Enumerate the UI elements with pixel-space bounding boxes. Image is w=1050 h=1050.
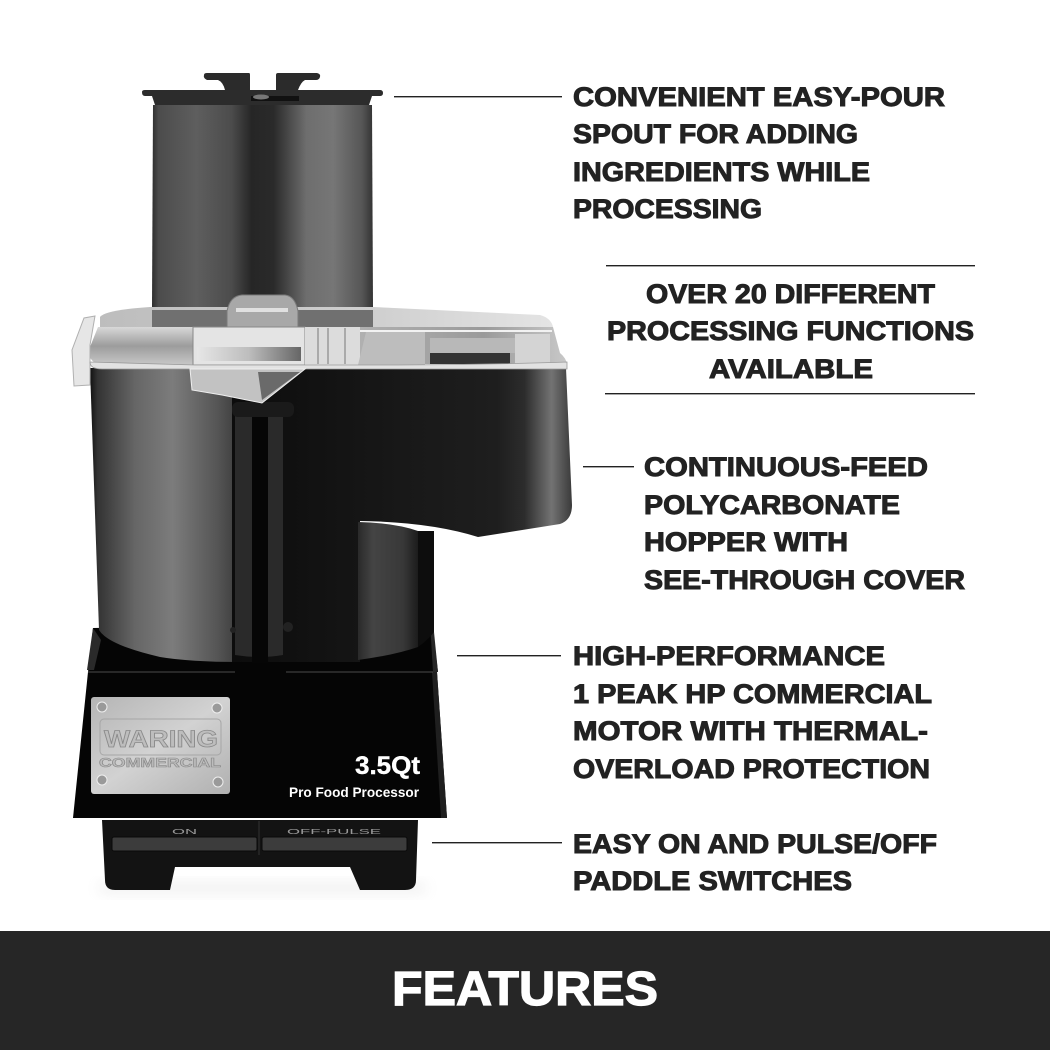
callout: commercial motor: MOTOR WITH THERMAL- <box>573 716 928 746</box>
callout: continuous-feed hopper: CONTINUOUS-FEED <box>644 452 928 482</box>
feed chute <box>230 402 294 663</box>
model label: Pro Food Processor <box>289 784 420 800</box>
on paddle switch <box>112 829 257 851</box>
callout: commercial motor: HIGH-PERFORMANCE <box>573 641 885 671</box>
callout: continuous-feed hopper <box>583 452 965 595</box>
callout: paddle switches <box>432 829 937 896</box>
switch housing and feet <box>102 820 418 890</box>
bowl lid rim <box>142 90 383 105</box>
on paddle switch: ON <box>172 829 197 836</box>
lid left band <box>88 327 195 365</box>
base back <box>88 622 438 672</box>
lid right band <box>360 327 567 364</box>
lid top surface <box>100 307 553 327</box>
callout: commercial motor <box>457 641 932 784</box>
bowl base through lid <box>152 310 373 327</box>
callout: easy-pour spout: INGREDIENTS WHILE <box>573 157 870 187</box>
motor cylinder <box>90 368 240 662</box>
callout: easy-pour spout <box>394 82 945 224</box>
callout: easy-pour spout: SPOUT FOR ADDING <box>573 119 858 149</box>
transparent hopper lid <box>72 295 567 403</box>
lid tab <box>72 316 95 386</box>
dark head housing <box>232 368 572 662</box>
callout: continuous-feed hopper: SEE-THROUGH COVER <box>644 565 965 595</box>
callout: processing functions: PROCESSING FUNCTIONS <box>607 316 974 346</box>
banner title: FEATURES <box>392 963 658 1016</box>
callout: commercial motor: 1 PEAK HP COMMERCIAL <box>573 679 932 709</box>
lid centre band <box>193 327 305 365</box>
callout: continuous-feed hopper: POLYCARBONATE <box>644 490 900 520</box>
off-pulse paddle switch: OFF-PULSE <box>287 829 382 836</box>
pour spout lid tabs <box>204 73 320 90</box>
funnel <box>190 369 305 403</box>
callout: easy-pour spout: CONVENIENT EASY-POUR <box>573 82 945 112</box>
callout: easy-pour spout: PROCESSING <box>573 194 762 224</box>
front panel <box>73 672 447 818</box>
callout: processing functions: OVER 20 DIFFERENT <box>646 279 936 309</box>
lid hump <box>227 295 298 327</box>
brand plate: COMMERCIAL <box>99 755 221 770</box>
brand plate <box>91 697 230 794</box>
callout: processing functions <box>605 265 975 394</box>
underside cavity <box>358 522 418 660</box>
footer banner <box>0 931 1050 1050</box>
callout: paddle switches: EASY ON AND PULSE/OFF <box>573 829 937 859</box>
capacity label: 3.5Qt <box>355 752 421 780</box>
spout notch <box>251 94 299 101</box>
callout: paddle switches: PADDLE SWITCHES <box>573 866 852 896</box>
ground shadow <box>100 884 425 892</box>
callout: commercial motor: OVERLOAD PROTECTION <box>573 754 930 784</box>
lid bottom rim <box>90 362 567 369</box>
callout: continuous-feed hopper: HOPPER WITH <box>644 527 848 557</box>
bowl body <box>152 105 373 330</box>
off-pulse paddle switch <box>262 829 407 851</box>
brand plate: WARING <box>104 726 218 753</box>
product image: food processor <box>72 73 572 892</box>
callout: processing functions: AVAILABLE <box>709 354 873 384</box>
